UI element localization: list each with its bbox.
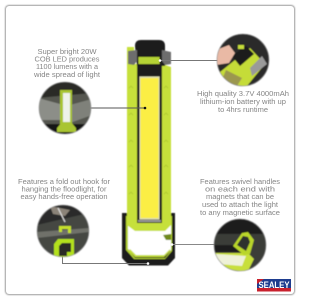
text: LED: 1100 lumens with a	[36, 64, 98, 71]
logo: SEALEY: SEALEY	[258, 280, 290, 290]
bottom handle	[122, 213, 175, 266]
green body	[127, 47, 171, 231]
photo circle: hook	[37, 205, 89, 262]
connector: battery	[159, 59, 218, 62]
text: battery: High quality 3.7V 4000mAh	[197, 91, 289, 98]
text: battery	[197, 91, 289, 114]
photo circle: handle	[214, 219, 266, 271]
connector: LED	[90, 107, 146, 109]
text: handles: used to attach the light	[202, 202, 278, 209]
text: handles: to any magnetic surface	[200, 210, 280, 217]
grey wings	[128, 50, 137, 65]
LED panel	[140, 76, 160, 220]
connector: handle	[171, 243, 215, 246]
text: battery: lithium-ion battery with up	[200, 99, 286, 106]
photo circle: battery	[216, 34, 269, 86]
black frame	[137, 62, 162, 223]
connector: hook	[62, 255, 149, 265]
text: handles: magnets that can be	[206, 194, 274, 201]
photo circle: LED	[38, 81, 92, 136]
text: hook: hanging the floodlight, for	[22, 186, 107, 194]
text: handles	[200, 179, 281, 217]
switch	[138, 57, 160, 64]
text: battery: to 4hrs runtime	[218, 107, 268, 114]
text: handles: on each end with	[205, 186, 275, 194]
text: hook: Features a fold out hook for	[18, 179, 111, 186]
top cap	[135, 40, 165, 66]
text: LED: wide spread of light	[33, 72, 100, 79]
text: hook: easy hands-free operation	[20, 194, 108, 201]
text: hook	[18, 179, 111, 201]
text: handles: Features swivel handles	[200, 179, 281, 186]
text: LED: Super bright 20W	[38, 49, 97, 56]
text: LED	[33, 49, 100, 79]
rib marks	[129, 86, 168, 194]
product: work light	[122, 40, 175, 266]
text: LED: COB LED produces	[34, 56, 100, 64]
